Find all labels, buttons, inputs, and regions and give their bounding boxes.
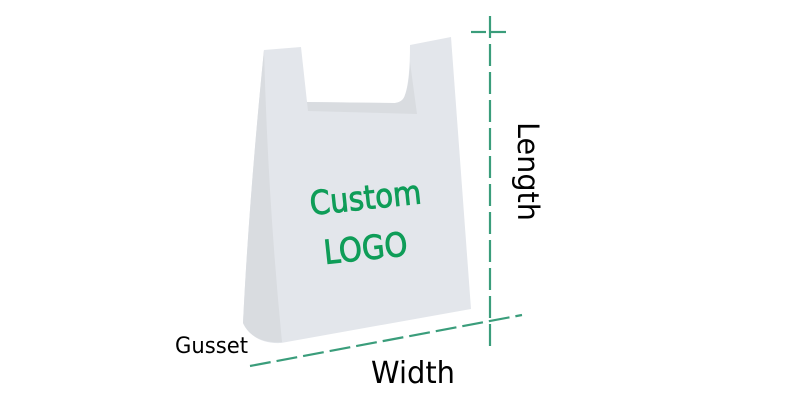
bag front panel [243,37,471,343]
width dimension line [250,315,522,366]
logo text: LOGO: LOGO [322,224,409,272]
label: Gusset: Gusset [175,334,248,359]
label: Width: Width [371,356,455,391]
label: Length: Length [511,122,545,221]
logo text: Custom: Custom [308,172,423,223]
inner fold behind handle opening [307,62,417,114]
length dimension line [471,16,506,347]
left gusset fold [243,50,282,342]
icon: plastic t-shirt bag [243,37,471,343]
